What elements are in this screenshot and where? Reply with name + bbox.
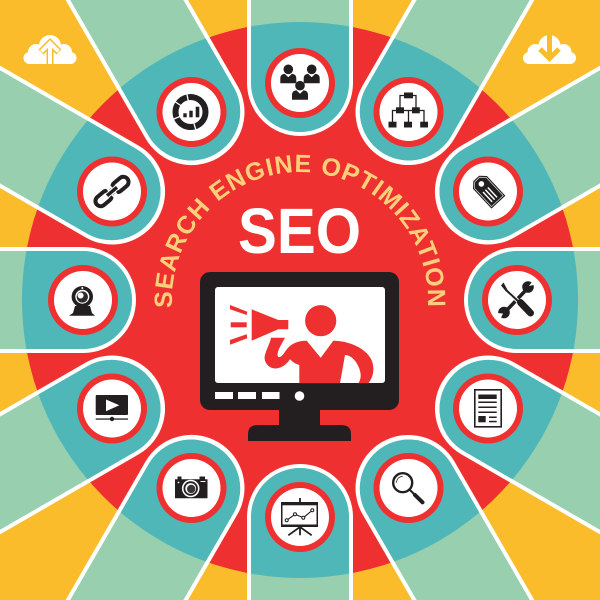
title: SEO: SEO — [238, 195, 361, 267]
icon: webcam — [69, 286, 95, 316]
heading: search engine optimization: SEARCH ENGINE OPTIMIZATION — [154, 154, 446, 308]
panel: tools pill — [464, 247, 600, 353]
panel: webcam pill — [0, 247, 136, 353]
icon: chain link — [92, 173, 132, 210]
icon: cloud upload — [24, 35, 76, 64]
panel: links pill — [0, 66, 165, 245]
panel: sitemap pill — [356, 0, 534, 165]
icon: document — [475, 390, 501, 427]
panel: tag pill — [435, 66, 600, 245]
icon: price tag — [469, 172, 505, 209]
icon: analytics donut — [172, 92, 206, 132]
icon: wrench and screwdriver — [496, 279, 538, 320]
icon: video player — [96, 395, 128, 421]
panel: search pill — [356, 435, 534, 600]
icon: people — [280, 64, 320, 100]
icon: camera — [175, 476, 208, 498]
panel: analytics pill — [66, 0, 245, 165]
megaphone person — [230, 305, 373, 383]
panel: people pill — [247, 0, 353, 136]
monitor — [200, 272, 399, 441]
icon: sitemap — [388, 92, 428, 128]
panel: video pill — [0, 356, 165, 534]
icon: cloud download — [523, 35, 576, 64]
icon: magnifier — [393, 473, 422, 502]
panel: camera pill — [66, 435, 245, 600]
panel: document pill — [435, 356, 600, 534]
panel: presentation pill — [247, 464, 353, 600]
icon: presentation board — [281, 498, 318, 535]
